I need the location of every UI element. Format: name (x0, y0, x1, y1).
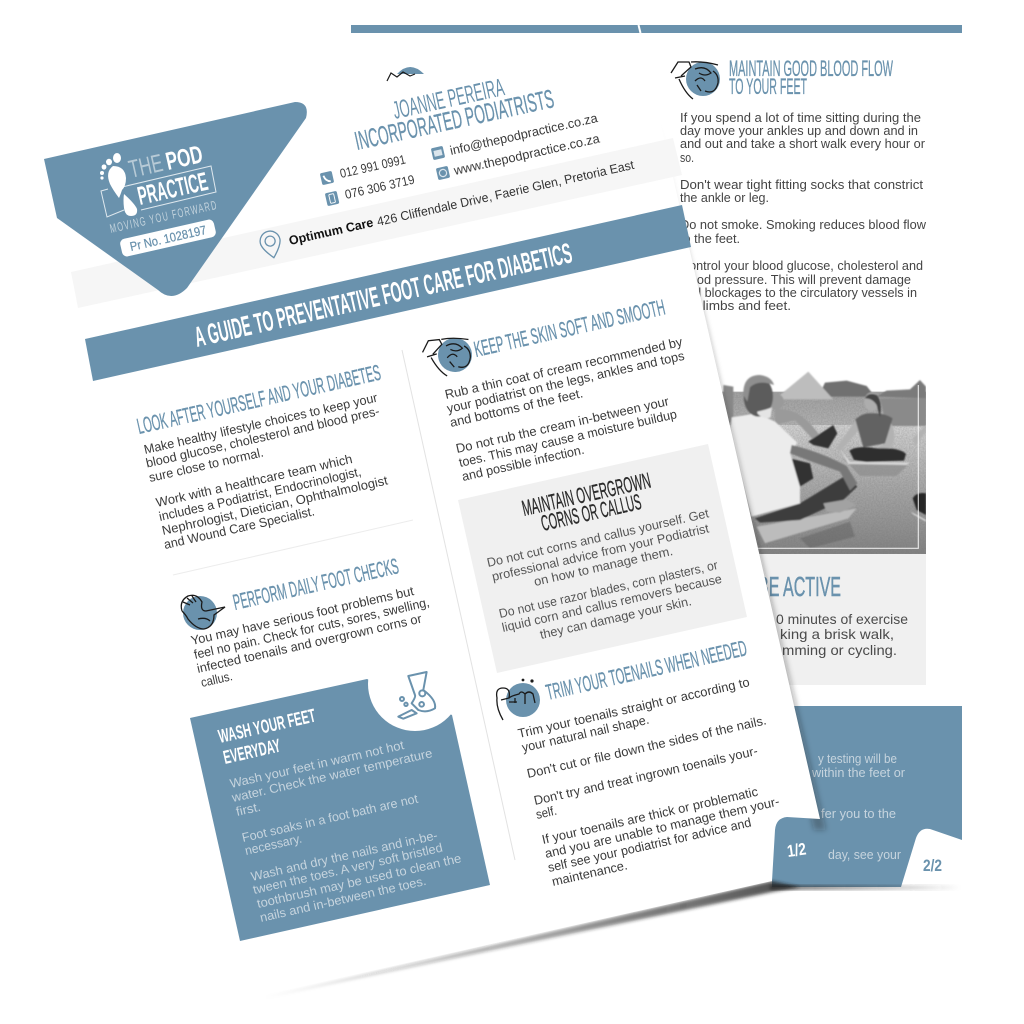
text: corn advice (486, 506, 723, 642)
section: trim your toenails: your natural nail shape. (520, 712, 650, 755)
section: trim your toenails: Trim your toenails straight or according to (516, 674, 751, 741)
heading: maintain overgrown: CORNS OR CALLUS (539, 489, 644, 536)
logo panel (44, 102, 307, 296)
heading: maintain good blood flow (729, 56, 893, 99)
address: 426 Cliffendale Drive, Faerie Glen, Pretoria East (376, 158, 636, 229)
icon: toenail trimming (497, 679, 540, 720)
section: look after yourself: Make healthy lifestyle choices to keep your (142, 390, 380, 457)
top bar of back page (351, 25, 962, 33)
panel: back page (351, 25, 962, 888)
text: corn advice: professional advice from your Podiatrist (491, 521, 711, 584)
panel: wash your feet everyday (190, 637, 490, 941)
heading: wash your feet: EVERYDAY (221, 736, 283, 769)
text: footer advice: within the feet or (811, 766, 905, 780)
section: trim your toenails: TRIM YOUR TOENAILS WHEN NEEDED (544, 635, 749, 705)
title banner: A GUIDE TO PREVENTATIVE FOOT CARE FOR DIABETICS (191, 237, 575, 354)
text: corn advice: they can damage your skin. (539, 594, 693, 642)
icon: web (436, 166, 450, 180)
panel: front page (44, 25, 820, 1002)
icon: mobile (325, 191, 339, 206)
section: perform daily foot checks: infected toenails and overgrown corns or (195, 611, 424, 676)
logo wordmark: MOVING YOU FORWARD (109, 198, 219, 236)
text: blood flow advice: and blockages to the circulatory vessels in (680, 285, 917, 300)
section: perform daily foot checks: PERFORM DAILY FOOT CHECKS (231, 553, 401, 615)
section: look after yourself (135, 360, 389, 552)
icon: foot inspection (181, 595, 225, 630)
practitioner name: JOANNE PEREIRA (390, 73, 507, 125)
section: trim your toenails: If your toenails are thick or problematic (540, 784, 760, 847)
text: blood flow advice: so. (680, 150, 694, 165)
logo wordmark: POD (163, 140, 205, 176)
text: blood flow advice: to the feet. (680, 231, 740, 246)
text: washing advice: necessary. (244, 832, 303, 858)
shadow of back page (770, 885, 960, 890)
text: blood flow advice (680, 110, 927, 313)
text: washing advice: Wash and dry the nails and in-be- (250, 828, 439, 884)
text: corn advice: on how to manage them. (533, 544, 674, 589)
logo wordmark: THE (126, 149, 165, 184)
heading: maintain overgrown (520, 468, 653, 536)
text: corn advice: Do not use razor blades, corn plasters, or (498, 558, 719, 621)
section: trim your toenails: self see your podiatrist for advice and (546, 815, 753, 875)
section: perform daily foot checks (181, 553, 431, 690)
contact details: info@thepodpractice.co.za (448, 110, 600, 158)
text: washing advice: nails and in-between the toes. (259, 874, 428, 925)
section: keep the skin soft and smooth: and possible infection. (460, 442, 586, 484)
text: exercise advice (776, 611, 908, 658)
text: footer advice (811, 752, 905, 862)
text: washing advice: toothbrush may be used to clean the (256, 851, 463, 911)
section: keep the skin soft and smooth: Do not rub the cream in-between your (454, 393, 671, 456)
section: keep the skin soft and smooth: Rub a thin coat of cream recommended by (443, 334, 684, 402)
text: footer advice: y testing will be (818, 752, 897, 766)
section: look after yourself: and Wound Care Specialist. (162, 503, 316, 552)
section: trim your toenails: Don't try and treat ingrown toenails your- (532, 743, 759, 808)
practitioner name (352, 73, 557, 156)
logo wordmark (109, 140, 219, 236)
icon: massaging hands (671, 62, 720, 99)
text: blood flow advice: Don't wear tight fitting socks that constrict (680, 177, 923, 192)
panel: be active (680, 554, 926, 685)
icon: massaging hands (421, 336, 474, 378)
icon: location pin (258, 229, 284, 260)
section: trim your toenails: maintenance. (550, 857, 629, 889)
logo wordmark: PRACTICE (135, 166, 211, 211)
section: look after yourself: LOOK AFTER YOURSELF AND YOUR DIABETES (135, 360, 383, 439)
section: look after yourself: includes a Podiatrist, Endocrinologist, (157, 464, 363, 524)
text: blood flow advice: Control your blood glucose, cholesterol and (680, 258, 923, 273)
registration number pill: Pr No. 1028197 (129, 223, 208, 254)
text: footer advice: fer you to the (821, 807, 896, 821)
page number 2/2: 2/2 (923, 856, 942, 875)
section: perform daily foot checks: feel no pain. Check for cuts, sores, swelling, (192, 594, 431, 662)
text: washing advice: water. Check the water temperature (230, 746, 434, 805)
section: keep the skin soft and smooth (421, 295, 686, 484)
icon: mail (431, 146, 445, 160)
text: blood flow advice: day move your ankles up and down and in (680, 123, 918, 138)
text: washing advice: tween the toes. A very soft bristled (252, 841, 444, 897)
contact details: 076 306 3719 (343, 172, 416, 202)
title banner (85, 205, 691, 381)
icon: footprint (100, 153, 137, 216)
heading: maintain overgrown: MAINTAIN OVERGROWN (520, 468, 653, 521)
logo box outline (101, 166, 216, 217)
text: blood flow advice: the ankle or leg. (680, 190, 769, 205)
panel: blue footer of back page (772, 706, 962, 887)
section: trim your toenails: self. (534, 803, 558, 822)
heading: be active: BE ACTIVE (758, 571, 841, 602)
shadow of front page (262, 110, 826, 998)
section: keep the skin soft and smooth: your podiatrist on the legs, ankles and tops (445, 348, 686, 416)
heading: maintain good blood flow: TO YOUR FEET (729, 74, 807, 99)
section: trim your toenails: Don't cut or file down the sides of the nails. (525, 712, 768, 781)
heading: wash your feet (216, 706, 318, 769)
text: blood flow advice: and out and take a short walk every hour or (680, 136, 926, 151)
text: corn advice: liquid corn and callus removers because (501, 572, 723, 635)
text: washing advice: Wash your feet in warm not hot (229, 738, 406, 791)
contact details (320, 110, 602, 206)
section: perform daily foot checks: You may have serious foot problems but (189, 583, 416, 648)
text: blood flow advice: the limbs and feet. (680, 298, 791, 313)
section: trim your toenails (497, 635, 781, 889)
text: exercise advice: 0 minutes of exercise (776, 611, 908, 627)
icon: phone (320, 171, 334, 185)
column divider lines (173, 350, 515, 860)
section: keep the skin soft and smooth: and bottoms of the feet. (448, 385, 584, 430)
address (258, 158, 636, 260)
contact details: www.thepodpractice.co.za (451, 130, 602, 178)
text: exercise advice: mming or cycling. (782, 642, 897, 658)
section: keep the skin soft and smooth: toes. This may cause a moisture buildup (457, 406, 678, 470)
address: Optimum Care (288, 216, 375, 248)
text: blood flow advice: Do not smoke. Smoking reduces blood flow (680, 217, 927, 232)
section: look after yourself: Work with a healthcare team which (154, 451, 354, 510)
text: footer advice: day, see your (828, 848, 901, 862)
grey address band (71, 138, 682, 308)
icon: foot washing (398, 672, 435, 719)
practitioner name: INCORPORATED PODIATRISTS (352, 83, 557, 156)
section: look after yourself: blood glucose, cholesterol and blood pres- (144, 403, 381, 470)
text: washing advice: Foot soaks in a foot bath are not (241, 792, 420, 845)
text: blood flow advice: blood pressure. This will prevent damage (680, 272, 911, 287)
panel: maintain overgrown corns or callus (458, 444, 747, 673)
section: look after yourself: Nephrologist, Dietician, Ophthalmologist (160, 472, 389, 538)
text: blood flow advice: If you spend a lot of time sitting during the (680, 110, 921, 125)
section: trim your toenails: and you are unable to manage them your- (543, 794, 781, 861)
text: washing advice: first. (235, 800, 262, 819)
text: exercise advice: king a brisk walk, (780, 626, 894, 642)
section: keep the skin soft and smooth: KEEP THE SKIN SOFT AND SMOOTH (472, 295, 667, 362)
page number 1/2: 1/2 (786, 840, 807, 861)
text: corn advice: Do not cut corns and callus yourself. Get (486, 506, 711, 570)
heading: wash your feet: WASH YOUR FEET (216, 706, 318, 748)
contact details: 012 991 0991 (338, 152, 407, 181)
section: look after yourself: sure close to normal. (147, 445, 265, 485)
section: perform daily foot checks: callus. (199, 668, 234, 690)
photo: group exercising outdoors (722, 371, 926, 554)
icon: cropped top icon (387, 67, 424, 81)
text: washing advice (229, 738, 463, 925)
